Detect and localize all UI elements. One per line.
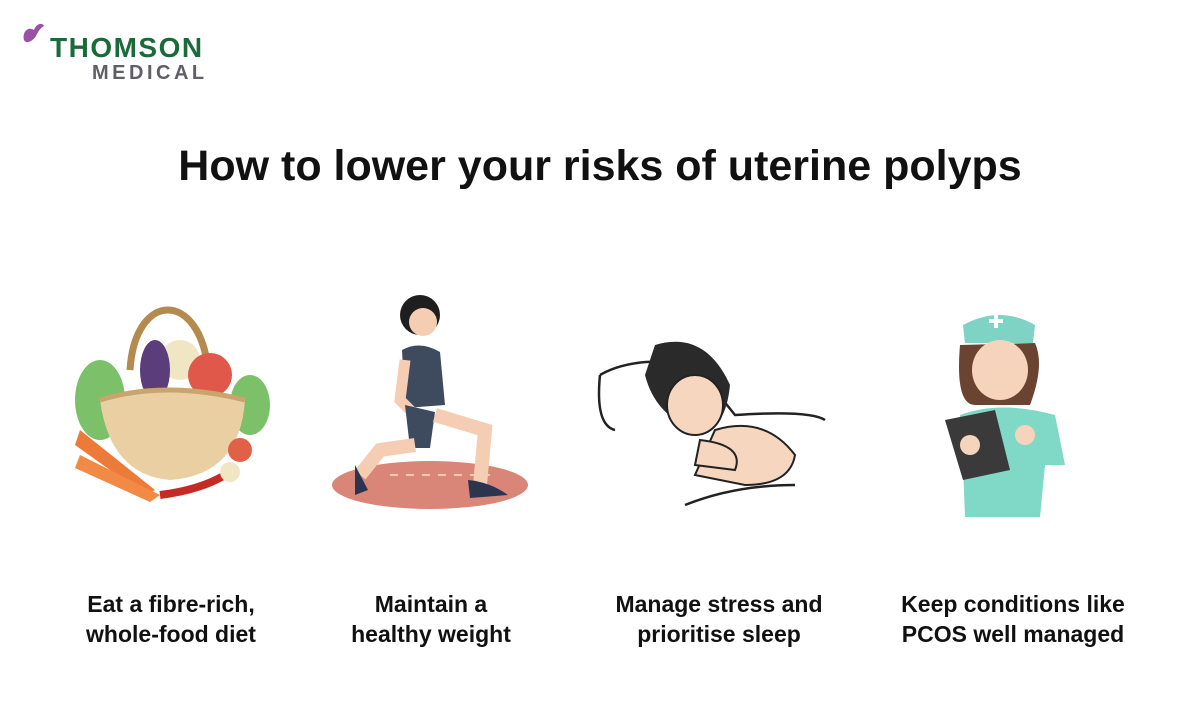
caption: sleep: Manage stress and (615, 591, 823, 617)
logo (24, 24, 208, 84)
icon: exercising woman (332, 295, 528, 509)
caption: PCOS: Keep conditions like (901, 591, 1125, 617)
icon: sleeping person (598, 342, 826, 506)
title: How to lower your risks of uterine polyps (178, 142, 1022, 190)
caption: diet (86, 591, 256, 647)
logo: MEDICAL (92, 62, 208, 84)
caption: PCOS (901, 591, 1125, 647)
caption: diet: whole-food diet (86, 621, 256, 647)
logo text: THOMSON (50, 32, 204, 63)
caption: weight (351, 591, 511, 647)
caption: sleep: prioritise sleep (637, 621, 801, 647)
caption: diet: Eat a fibre-rich, (87, 591, 255, 617)
caption: weight: Maintain a (375, 591, 487, 617)
caption: PCOS: PCOS well managed (902, 621, 1124, 647)
icon: vegetable basket (75, 306, 270, 502)
caption: weight: healthy weight (351, 621, 511, 647)
icon: nurse (945, 315, 1065, 517)
icon: butterfly (24, 24, 44, 42)
caption: sleep (615, 591, 823, 647)
